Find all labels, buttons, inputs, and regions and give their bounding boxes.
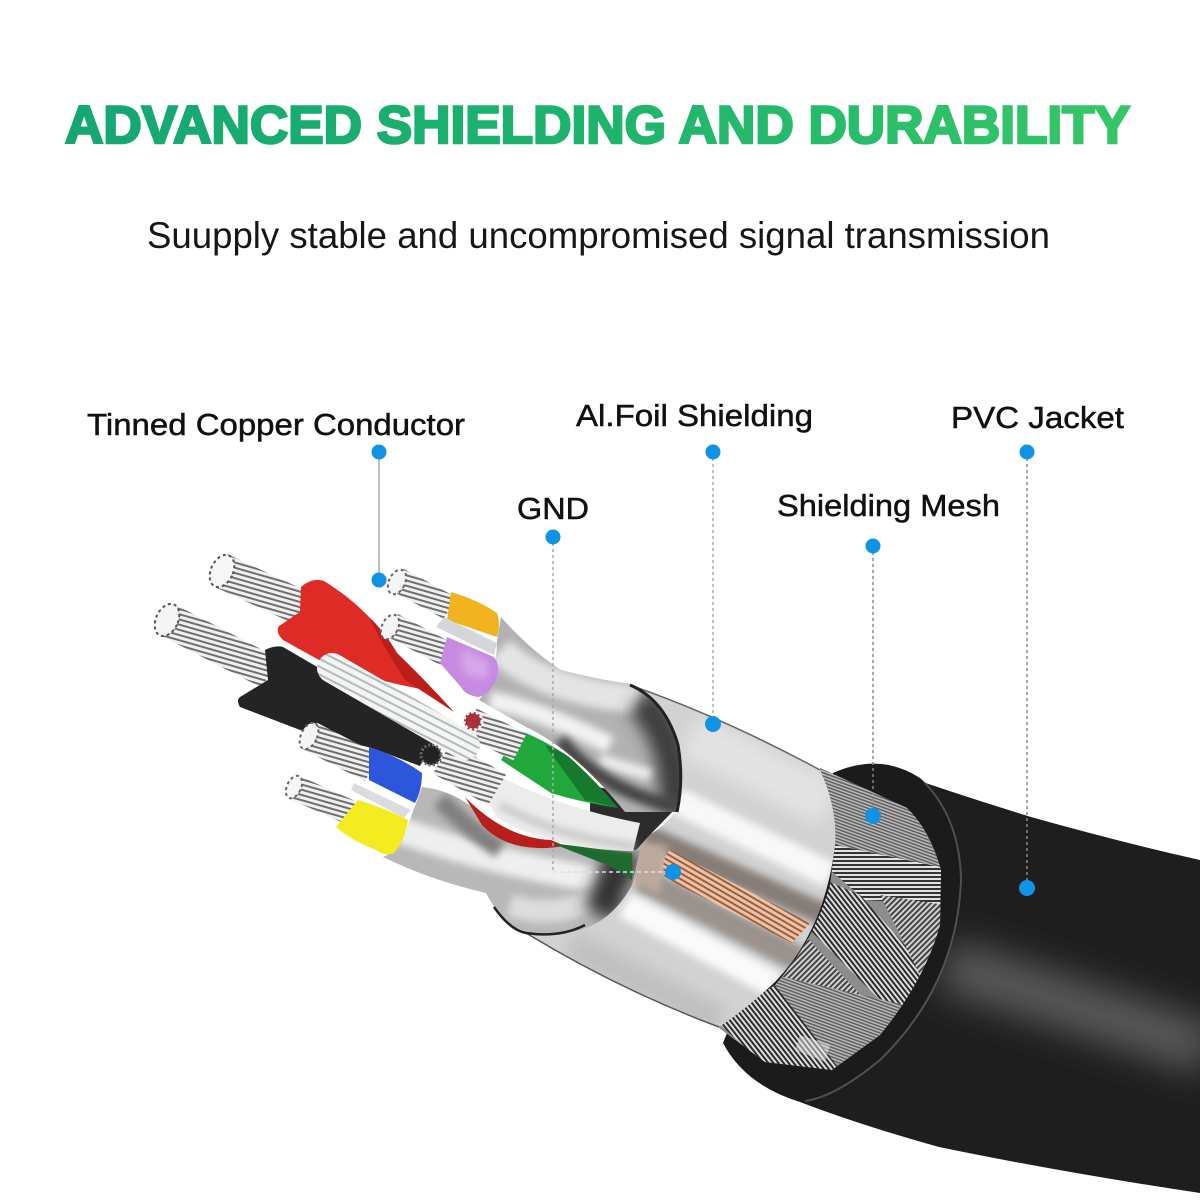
callout: PVC Jacket (951, 400, 1124, 896)
purple wire (377, 612, 498, 697)
title: ADVANCED SHIELDING AND DURABILITY (65, 96, 1130, 155)
foil lower rim (494, 907, 585, 934)
red wire (205, 551, 454, 712)
cable illustration (150, 551, 1200, 1193)
callout: Tinned Copper Conductor: Tinned Copper Conductor (87, 407, 465, 442)
lower silver shield tube (383, 787, 640, 933)
foil interior backing (590, 785, 678, 855)
subtitle: Suupply stable and uncompromised signal transmission (147, 215, 1050, 256)
foil rim arc (630, 685, 681, 812)
callout: GND (517, 491, 681, 880)
callout: PVC Jacket: PVC Jacket (951, 400, 1124, 435)
callout: GND: GND (517, 491, 589, 526)
white insulated wire (332, 668, 640, 851)
black wire (150, 600, 433, 766)
red lead lower section (465, 797, 565, 848)
yellow wire (283, 773, 408, 854)
callout: Tinned Copper Conductor (87, 407, 465, 588)
silver strip blue yellow (351, 783, 411, 818)
callout: Al.Foil Shielding: Al.Foil Shielding (576, 398, 813, 433)
callout: Shielding Mesh: Shielding Mesh (777, 488, 1000, 523)
green wire (464, 712, 618, 808)
silver foil strip (436, 617, 497, 655)
black wire cut end (421, 745, 441, 765)
blue wire (296, 720, 422, 803)
Al foil shielding (526, 684, 835, 1027)
callout: Shielding Mesh (777, 488, 1000, 824)
callout: Al.Foil Shielding (576, 398, 813, 732)
shielding mesh braid (718, 768, 941, 1070)
green lead lower section (551, 843, 632, 880)
PVC jacket (723, 764, 1200, 1193)
copper drain wire (663, 850, 810, 943)
orange wire (384, 567, 499, 637)
upper silver shield tube (479, 617, 680, 812)
